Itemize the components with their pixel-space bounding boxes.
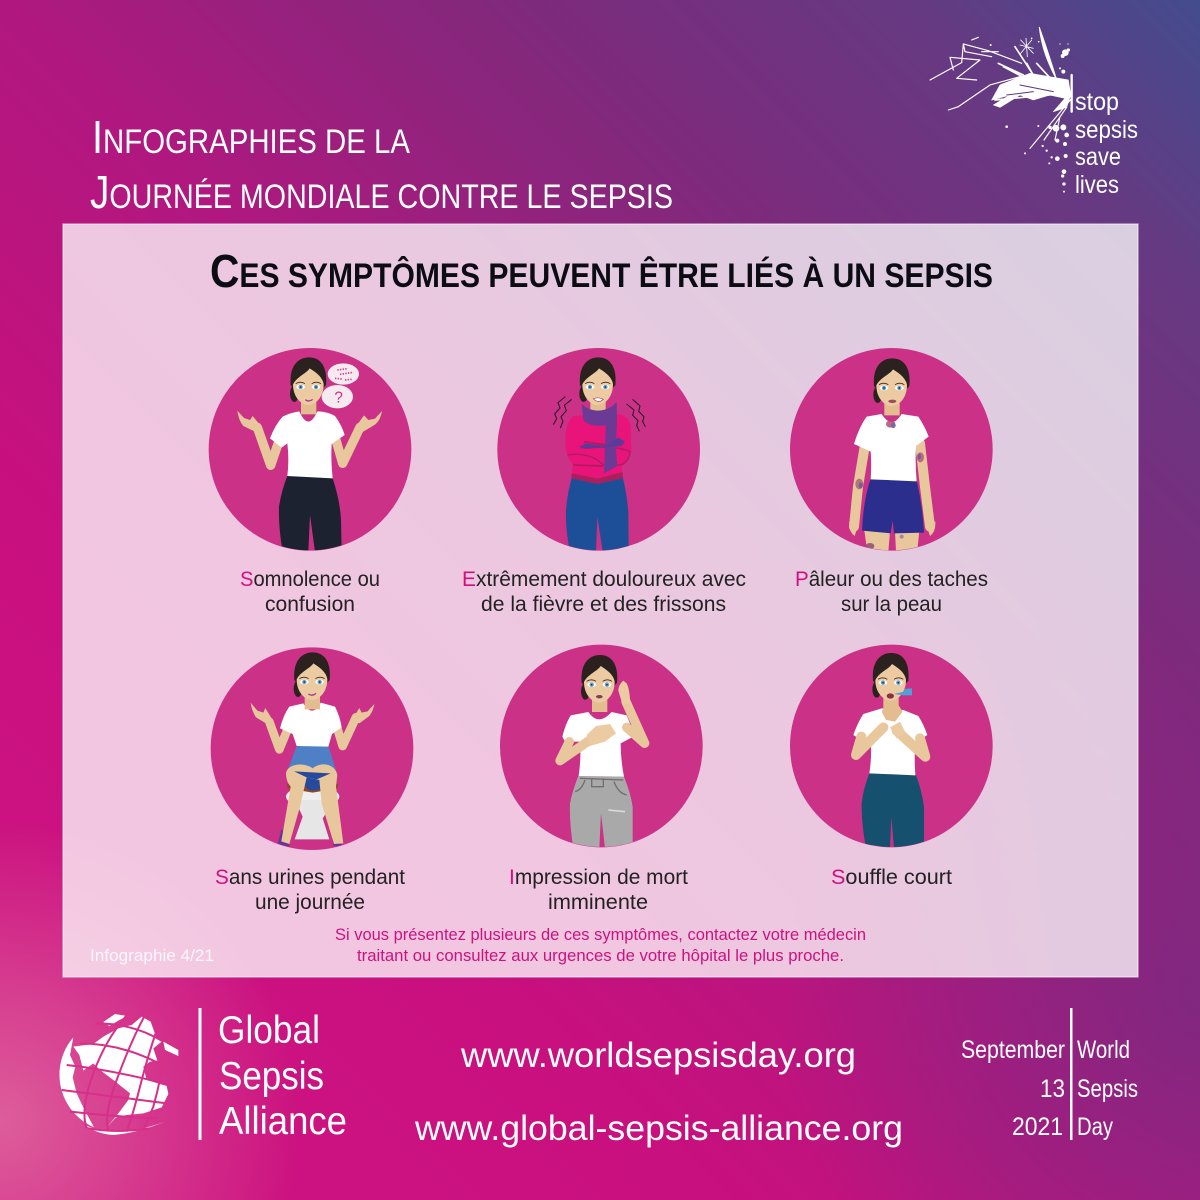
- advice note: [335, 926, 866, 965]
- symptom 3: skin: [790, 348, 993, 552]
- slogan text: save: [1075, 143, 1121, 171]
- label: pâleur: sur la peau: [841, 593, 942, 616]
- logo: stop sepsis save lives: [930, 27, 1138, 199]
- organisation name: [218, 1009, 347, 1143]
- label: douleur fièvre: [462, 568, 746, 616]
- world sepsis day date block: 2021: [1012, 1113, 1063, 1141]
- icon: white splatter: [930, 27, 1072, 193]
- label: pâleur: Pâleur ou des taches: [795, 568, 988, 591]
- label: impression de mort: imminente: [548, 891, 648, 914]
- advice note: traitant ou consultez aux urgences de votre hôpital le plus proche.: [357, 947, 844, 965]
- panel heading: CES SYMPTÔMES PEUVENT ÊTRE LIÉS À UN SEPSIS: [210, 245, 993, 297]
- label: douleur fièvre: de la fièvre et des frissons: [481, 593, 726, 616]
- symptom 4: no urine: [211, 647, 413, 850]
- header title: INFOGRAPHIES DE LA: [92, 111, 410, 163]
- label: somnolence: confusion: [265, 593, 355, 616]
- world sepsis day date block: Sepsis: [1077, 1075, 1138, 1103]
- label: sans urines: Sans urines pendant: [215, 866, 405, 889]
- world sepsis day date block: 13: [1040, 1075, 1065, 1103]
- infographic counter: Infographie 4/21: [90, 946, 214, 965]
- slogan text: sepsis: [1075, 116, 1138, 144]
- slogan text: [1075, 88, 1138, 199]
- world sepsis day date block: [961, 1008, 1138, 1141]
- slogan text: lives: [1075, 171, 1119, 199]
- icon: globe: [59, 1012, 178, 1135]
- symptom 5: impression of death: [500, 645, 703, 848]
- divider: [198, 1008, 202, 1140]
- symptom 2: fever and chills: [497, 348, 700, 552]
- website links: [414, 1036, 903, 1148]
- symptom 1: confusion: [209, 348, 411, 552]
- organisation name: Alliance: [219, 1100, 347, 1143]
- main panel: [63, 224, 1138, 977]
- label: douleur fièvre: Extrêmement douloureux avec: [462, 568, 746, 591]
- label: souffle court: Souffle court: [831, 866, 952, 889]
- label: sans urines: une journée: [255, 891, 365, 914]
- world sepsis day date block: World: [1077, 1036, 1130, 1064]
- symptom 6: short breath: [790, 645, 993, 848]
- world sepsis day date block: Day: [1077, 1113, 1113, 1141]
- slogan text: stop: [1075, 88, 1119, 116]
- symptom 1: confusion: ?: [334, 390, 343, 407]
- advice note: Si vous présentez plusieurs de ces symptômes, contactez votre médecin: [335, 926, 866, 944]
- logo: global sepsis alliance: [59, 1008, 347, 1143]
- website links: www.global-sepsis-alliance.org: [414, 1109, 903, 1148]
- label: impression de mort: [509, 866, 688, 914]
- label: pâleur: [795, 568, 988, 616]
- website links: www.worldsepsisday.org: [460, 1036, 856, 1075]
- label: impression de mort: Impression de mort: [509, 866, 688, 889]
- organisation name: Sepsis: [219, 1055, 324, 1098]
- organisation name: Global: [218, 1009, 320, 1052]
- label: somnolence: Somnolence ou: [240, 568, 380, 591]
- label: sans urines: [215, 866, 405, 914]
- world sepsis day date block: September: [961, 1036, 1065, 1064]
- header title: JOURNÉE MONDIALE CONTRE LE SEPSIS: [90, 166, 673, 218]
- label: somnolence: [240, 568, 380, 616]
- header title: [90, 111, 673, 218]
